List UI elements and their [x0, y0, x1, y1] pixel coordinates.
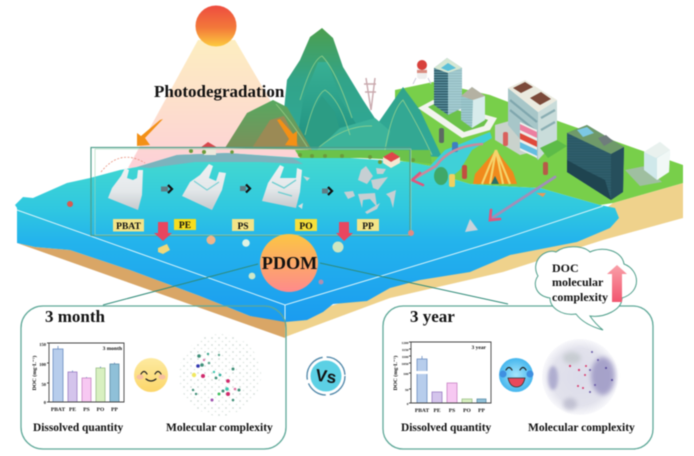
- red roof house right: [383, 152, 400, 168]
- label PO: [295, 219, 317, 232]
- label PP: [357, 219, 379, 232]
- bar chart: 3 year DOC: 100: [403, 372, 409, 376]
- bar chart: 3 month DOC: 50: [42, 382, 47, 387]
- orange light arrows: [137, 119, 297, 146]
- dark office building: [567, 125, 624, 200]
- bar chart: 3 month DOC: 150: [39, 342, 47, 347]
- bar chart: 3 year DOC: DOC (mg·L⁻¹): [392, 356, 399, 390]
- degradation frame: [91, 148, 411, 236]
- island base: sand: [17, 183, 683, 338]
- bar chart: 3 month DOC: PP: [111, 407, 118, 413]
- red down arrow left: [154, 222, 172, 241]
- red roof house left: [200, 142, 218, 155]
- bar chart: 3 month DOC: DOC (mg·L⁻¹): [31, 356, 38, 390]
- callout: DOC molecular complexity: DOC: [552, 261, 579, 275]
- bar chart: 3 year DOC: PS: [449, 408, 455, 414]
- bar chart: 3 year DOC: PO: [463, 408, 472, 414]
- floating particles: [67, 201, 414, 284]
- floating plastic fragment: [465, 219, 478, 232]
- PDOM circle: PDOM: [262, 253, 317, 273]
- pollution arrow: town to water: [490, 177, 555, 220]
- bar chart: 3 month DOC: [31, 342, 124, 413]
- bar chart: 3 year DOC: 1050: [402, 362, 409, 366]
- sun: [196, 6, 236, 46]
- hotel building: [495, 80, 567, 160]
- caption: Dissolved quantity: Dissolved quantity: [33, 422, 124, 434]
- bar chart: 3 year DOC: PP: [478, 408, 485, 414]
- town plaza: [418, 100, 497, 138]
- icon: VS badge: [307, 357, 345, 395]
- label PBAT: [113, 219, 144, 232]
- bar chart: 3 year DOC: 50: [405, 388, 409, 392]
- white water edge lines: [17, 206, 603, 320]
- heading: 3 month: 3 month: [45, 307, 106, 326]
- caption: Dissolved quantity: Dissolved quantity: [401, 422, 492, 434]
- tower 2: [461, 87, 485, 128]
- plastic fragments: PP: [344, 166, 396, 214]
- connector lines to panels: [103, 263, 508, 305]
- people on shore: [434, 128, 548, 187]
- heading: 3 year: 3 year: [410, 307, 455, 326]
- tower 1: [434, 58, 462, 115]
- mountains: [225, 28, 442, 157]
- label PS: [232, 219, 254, 232]
- panel: 3 year: [383, 306, 653, 449]
- red down arrow right: [336, 222, 353, 241]
- caption: Molecular complexity: Molecular complexity: [166, 422, 273, 434]
- radio mast: [364, 78, 376, 110]
- dashed sunlight arc: [101, 157, 145, 172]
- sun light beam: [128, 40, 305, 168]
- panel: 3 month: [21, 306, 286, 449]
- arrow 1: [161, 185, 172, 193]
- label PS: PS: [237, 222, 249, 232]
- bar chart: 3 year DOC: PE: [433, 408, 441, 414]
- label PP: PP: [362, 222, 374, 232]
- PDOM circle: [260, 234, 318, 292]
- coastal trees: [189, 149, 415, 164]
- callout: DOC molecular complexity: [535, 247, 636, 330]
- bar chart: 3 year DOC: 1150: [402, 348, 409, 352]
- molecular network: high complexity: [542, 339, 618, 415]
- water tower: [413, 60, 431, 84]
- icon: VS badge: Vs: [314, 366, 338, 387]
- callout: DOC molecular complexity: complexity: [552, 290, 608, 304]
- pollution arrow: river to water: [412, 144, 482, 185]
- bar chart: 3 year DOC: 0: [407, 402, 409, 406]
- icon: smiling face: [134, 358, 168, 392]
- bar chart: 3 month DOC: 3 month: [103, 346, 122, 352]
- arrow 2: [240, 184, 250, 192]
- bar chart: 3 month DOC: 0: [44, 400, 47, 405]
- river: [430, 132, 492, 178]
- bar chart: 3 month DOC: PE: [69, 407, 76, 413]
- molecular network: low complexity: [179, 334, 261, 416]
- icon: rising arrow: [607, 265, 627, 302]
- icon: laughing face: [499, 358, 534, 392]
- bar chart: 3 month DOC: PO: [97, 407, 105, 413]
- plastic bag: PE: [182, 164, 226, 210]
- bar chart: 3 month DOC: PS: [83, 407, 90, 413]
- green land: [395, 82, 683, 205]
- coastal green strip: [295, 150, 432, 164]
- label PE: PE: [179, 221, 191, 231]
- bar chart: 3 year DOC: PBAT: [415, 408, 429, 414]
- bar chart: 3 month DOC: PBAT: [51, 407, 65, 413]
- plastic bag: PBAT: [108, 168, 143, 210]
- circus tent: [473, 150, 517, 184]
- callout: DOC molecular complexity: molecular: [552, 275, 604, 289]
- bar chart: 3 month DOC: 100: [39, 362, 47, 367]
- label PE: [174, 219, 196, 231]
- bar chart: 3 year DOC: 1200: [402, 341, 409, 345]
- bar chart: 3 year DOC: 3 year: [471, 345, 487, 351]
- arrow 3: [322, 187, 332, 195]
- label PO: PO: [299, 222, 313, 232]
- bar chart: 3 year DOC: 1100: [402, 355, 409, 359]
- heading: Photodegradation: Photodegradation: [154, 82, 285, 101]
- shoreline shallow water: [137, 153, 303, 168]
- label PBAT: PBAT: [116, 222, 141, 232]
- bar chart: 3 year DOC: [392, 341, 491, 414]
- caption: Molecular complexity: Molecular complexity: [528, 422, 635, 434]
- small white building: [625, 142, 670, 186]
- plastic bag: PO: [262, 165, 310, 209]
- water surface: [15, 153, 619, 322]
